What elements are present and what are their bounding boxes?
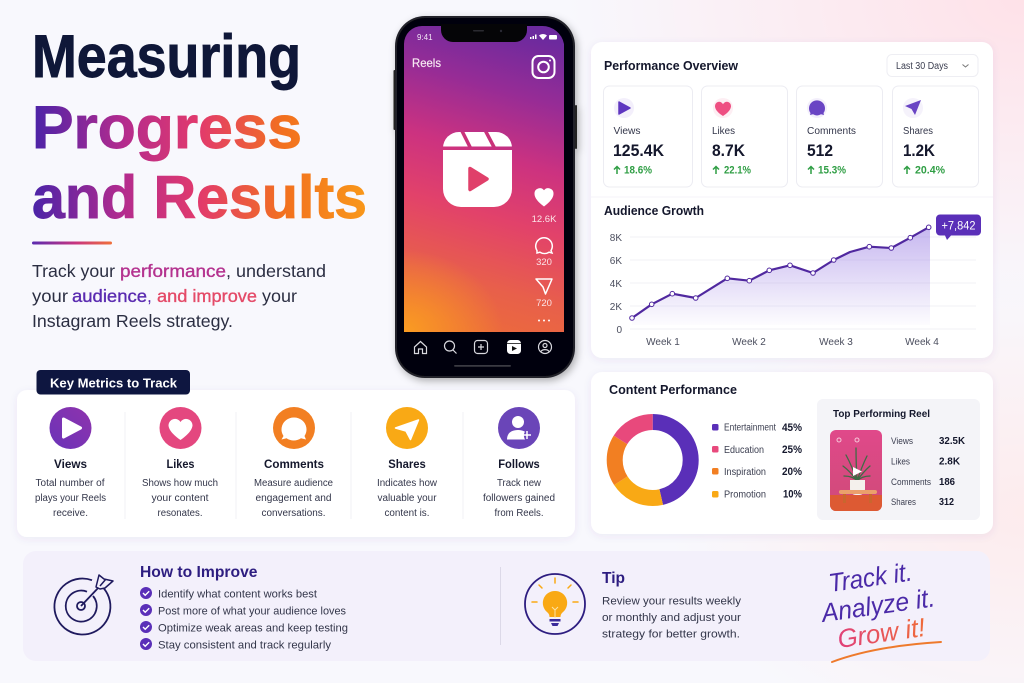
week labels: Week 4 (905, 337, 939, 348)
metric: views (35, 407, 106, 519)
data points (630, 225, 931, 320)
reel stats: Likes (891, 456, 910, 466)
home indicator (454, 365, 511, 367)
callout: +7,842 (936, 214, 981, 240)
subtitle: Track your (32, 261, 115, 281)
subtitle: your (262, 286, 297, 306)
subtitle: your (32, 286, 68, 306)
title: and Results (32, 164, 367, 231)
stat: views (604, 86, 692, 187)
stat: likes: 8.7K (712, 142, 745, 160)
checklist (140, 587, 348, 652)
icon: reels logo (443, 130, 512, 207)
metric: views: plays your Reels (35, 493, 106, 504)
metric: comments: conversations. (262, 508, 326, 519)
reel stats: Comments (891, 477, 931, 487)
subtitle (32, 261, 326, 331)
stat: views: 125.4K (613, 142, 664, 160)
stat: shares: Shares (903, 126, 933, 137)
icon: light bulb (525, 574, 585, 634)
metric: shares: Shares (388, 457, 426, 471)
reel stats: 186 (939, 477, 955, 488)
legend: Entertainment (724, 422, 776, 434)
legend (712, 422, 802, 500)
y axis labels: 4K (610, 279, 622, 290)
metric: comments: engagement and (256, 493, 332, 504)
panel: key metrics (17, 370, 575, 537)
stat: shares: 20.4% (915, 164, 945, 176)
phone body (394, 16, 577, 378)
callout: +7,842: +7,842 (942, 220, 976, 232)
heading: audience growth: Audience Growth (604, 203, 704, 218)
reel stats (891, 436, 966, 508)
subtitle: , understand (226, 261, 326, 281)
metric: shares (377, 407, 438, 519)
legend: 25% (782, 444, 802, 456)
legend: 45% (782, 422, 802, 434)
tip text: or monthly and adjust your (602, 612, 741, 624)
metric: views: receive. (53, 508, 88, 519)
heading: performance overview: Performance Overview (604, 58, 739, 73)
tip text: strategy for better growth. (602, 628, 740, 640)
dropdown (887, 54, 978, 76)
title: Measuring (32, 23, 301, 90)
week labels: Week 2 (732, 337, 766, 348)
icon: heart (534, 188, 554, 206)
tip text: Review your results weekly (602, 596, 742, 608)
reel stats: Shares (891, 497, 916, 507)
subtitle: , (147, 286, 152, 306)
trend line (632, 227, 929, 318)
legend: Education (724, 445, 764, 456)
metric: follows (483, 407, 555, 519)
more dots (538, 320, 550, 322)
metric: follows: Follows (498, 457, 540, 471)
phone mockup (394, 16, 577, 378)
side actions (532, 188, 557, 322)
y axis labels: 6K (610, 256, 622, 267)
legend: Promotion (724, 490, 766, 500)
heading: tip: Tip (602, 570, 625, 587)
reels label: Reels (412, 56, 441, 70)
share count: 720 (536, 298, 552, 309)
metric: likes: your content (152, 493, 209, 504)
heading: content performance: Content Performance (609, 382, 737, 397)
metric: views: Total number of (36, 478, 105, 489)
reel stats: 2.8K (939, 456, 961, 468)
badge: key metrics to track: Key Metrics to Track (50, 376, 178, 390)
metric: likes: Likes (166, 457, 195, 471)
icon: reels nav (507, 340, 521, 354)
panel: content performance (591, 372, 993, 534)
reel stats: 32.5K (939, 436, 966, 447)
reel thumbnail (830, 430, 882, 511)
y axis labels (610, 233, 622, 336)
title: Progress (32, 94, 302, 161)
metric: comments (254, 407, 333, 519)
tip text (602, 596, 742, 640)
stat: views: Views (614, 126, 640, 137)
subtitle: performance (120, 261, 226, 281)
underline stroke (832, 642, 941, 662)
stat: comments: Comments (807, 126, 856, 137)
handwritten slogan (818, 557, 941, 662)
heading: how to improve: How to Improve (140, 564, 258, 581)
icon: share (536, 279, 552, 294)
metric: follows: followers gained (483, 493, 555, 504)
legend: 20% (782, 466, 802, 478)
line chart: audience growth (610, 214, 981, 348)
week labels: Week 1 (646, 337, 680, 348)
subtitle: audience (72, 286, 147, 306)
stat: comments: 512 (807, 142, 833, 160)
status bar: 9:41 (417, 33, 433, 42)
checklist: Post more of what your audience loves (158, 606, 346, 618)
panel: top performing reel (817, 399, 980, 520)
icon: target (54, 575, 113, 635)
title underline (32, 242, 112, 244)
metric: follows: from Reels. (494, 508, 544, 519)
comment count: 320 (536, 257, 552, 268)
panel: performance overview (591, 42, 993, 358)
reel stats: Views (891, 436, 913, 446)
icon: comment (536, 238, 552, 254)
handwritten slogan: Grow it! (836, 612, 927, 654)
metric: likes (142, 407, 218, 519)
title (32, 23, 367, 231)
handwritten slogan: Track it. (827, 557, 914, 598)
donut chart (615, 422, 691, 498)
area fill (632, 227, 930, 325)
metric: shares: valuable your (378, 493, 437, 504)
metric: comments: Comments (264, 457, 324, 471)
metric: likes: Shows how much (142, 478, 218, 489)
subtitle: and improve (157, 286, 257, 306)
legend: Inspiration (724, 467, 766, 478)
handwritten slogan: Analyze it. (818, 582, 937, 628)
status bar (417, 33, 557, 42)
icon: search (444, 341, 456, 354)
icon: add (474, 340, 488, 354)
stat: shares: 1.2K (903, 142, 935, 160)
badge: key metrics to track (36, 370, 190, 394)
metric: likes: resonates. (158, 508, 202, 519)
metric: shares: Indicates how (377, 478, 438, 489)
stat: likes: 22.1% (724, 164, 751, 176)
stat: comments: 15.3% (818, 164, 846, 176)
stat: comments (796, 86, 882, 187)
icon: instagram (532, 56, 554, 78)
dropdown: Last 30 Days (896, 61, 948, 72)
legend: 10% (783, 488, 802, 500)
checklist: Identify what content works best (158, 588, 317, 600)
panel: bottom banner (23, 551, 990, 662)
y axis labels: 8K (610, 233, 622, 244)
week labels (646, 337, 939, 348)
heading: top performing reel: Top Performing Reel (833, 408, 930, 420)
phone screen (404, 24, 564, 332)
y axis labels: 2K (610, 302, 622, 313)
metric: shares: content is. (384, 508, 430, 519)
icon: home (414, 342, 426, 354)
metric: views: Views (54, 457, 87, 471)
week labels: Week 3 (819, 337, 853, 348)
metric: follows: Track new (497, 478, 542, 489)
stat: likes: Likes (712, 126, 735, 137)
subtitle: Instagram Reels strategy. (32, 311, 233, 331)
checklist: Stay consistent and track regularly (158, 640, 332, 652)
icon: profile (538, 340, 552, 354)
stat: views: 18.6% (624, 164, 652, 176)
like count: 12.6K (532, 214, 557, 225)
stat: likes (702, 86, 788, 187)
checklist: Optimize weak areas and keep testing (158, 622, 348, 634)
stat: shares (892, 86, 978, 187)
y axis labels: 0 (616, 325, 622, 336)
phone nav bar (414, 340, 552, 354)
metric: comments: Measure audience (254, 478, 333, 489)
reel stats: 312 (939, 497, 954, 508)
